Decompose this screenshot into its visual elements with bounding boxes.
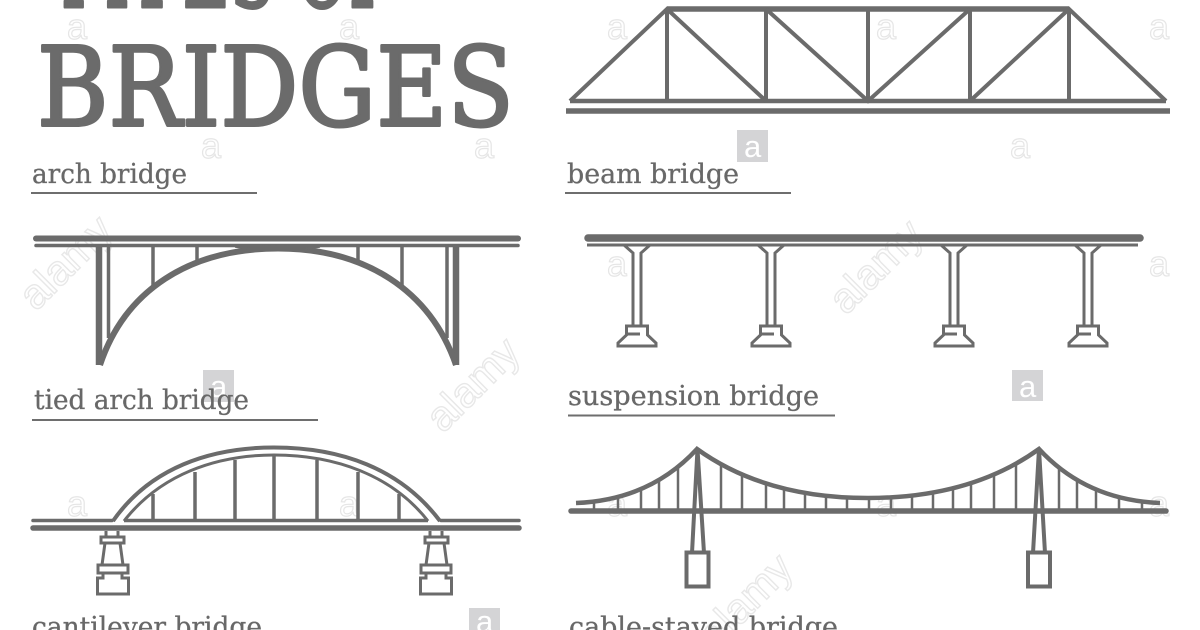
infographic canvas: a xyxy=(1149,243,1170,284)
watermark badge: a xyxy=(744,129,762,164)
suspension bridge illustration xyxy=(571,449,1166,586)
pier: right xyxy=(420,531,452,594)
watermark badge xyxy=(203,369,234,404)
infographic canvas: alamy xyxy=(416,328,529,440)
watermark badge: a xyxy=(210,369,228,404)
label: arch bridge: arch bridge xyxy=(32,159,187,190)
pier: left xyxy=(98,531,128,594)
tower: left xyxy=(686,449,708,586)
pier 3 xyxy=(935,245,973,346)
infographic canvas: a xyxy=(876,6,897,47)
watermark badge xyxy=(1012,369,1043,404)
arch bridge illustration xyxy=(36,238,518,365)
label: tied arch bridge: tied arch bridge xyxy=(34,385,249,416)
watermark badge xyxy=(469,604,500,630)
infographic canvas: alamy xyxy=(819,210,932,322)
truss illustration (top right) xyxy=(566,9,1170,111)
tower: right xyxy=(1028,449,1050,586)
watermark badge: a xyxy=(1019,369,1037,404)
infographic canvas: a xyxy=(339,6,360,47)
infographic canvas: a xyxy=(1149,6,1170,47)
infographic canvas: a xyxy=(1010,125,1031,166)
infographic canvas: a xyxy=(607,483,628,524)
infographic canvas: a xyxy=(1149,483,1170,524)
infographic canvas: a xyxy=(474,125,495,166)
infographic canvas: a xyxy=(607,243,628,284)
infographic canvas: a xyxy=(339,483,360,524)
title: BRIDGES xyxy=(37,24,514,152)
infographic canvas: a xyxy=(67,483,88,524)
infographic canvas: a xyxy=(876,483,897,524)
watermark badge xyxy=(737,129,768,164)
infographic canvas: a xyxy=(201,125,222,166)
infographic canvas: a xyxy=(607,6,628,47)
label: beam bridge: beam bridge xyxy=(567,159,739,190)
pier 1 xyxy=(618,245,656,346)
beam bridge illustration (piers) xyxy=(587,238,1140,346)
tied arch bridge illustration xyxy=(33,448,519,594)
label: suspension bridge: suspension bridge xyxy=(568,381,819,412)
infographic canvas: alamy xyxy=(9,206,122,318)
pier 2 xyxy=(752,245,790,346)
pier 4 xyxy=(1069,245,1107,346)
infographic canvas: a xyxy=(67,6,88,47)
